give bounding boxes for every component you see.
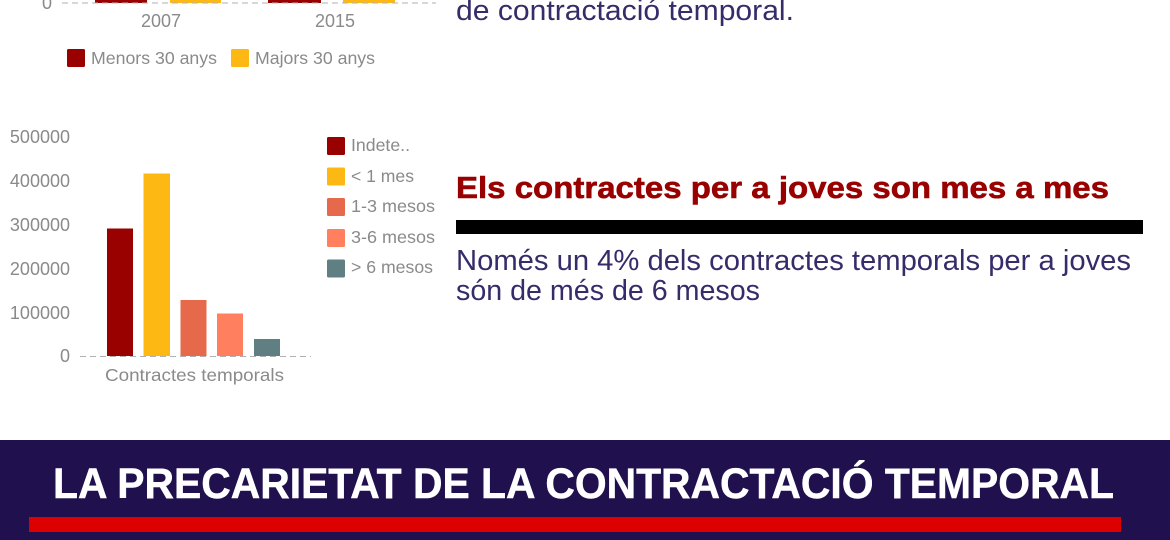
x axis label: Contractes temporals [105,365,284,385]
legend: age groups: Menors 30 anys [91,48,217,68]
y axis labels [10,127,70,366]
y axis labels: 100000 [10,303,70,323]
heading: contracts for young people: Els contractes per a joves son mes a mes [456,170,1109,205]
bar chart: temporary contracts by duration [10,127,435,385]
bars 2007 [95,0,221,3]
y axis labels: 200000 [10,259,70,279]
black rule under heading [456,220,1143,234]
bars 2015 [268,0,395,3]
y axis labels: 0 [60,346,70,366]
legend: age groups: Majors 30 anys [255,48,375,68]
banner red bar [29,517,1121,532]
y axis labels: 300000 [10,215,70,235]
legend: contract durations: 3-6 mesos [351,227,435,247]
legend: contract durations: > 6 mesos [351,257,433,277]
y axis labels: 400000 [10,171,70,191]
text block: only 4 percent: són de més de 6 mesos [456,275,760,307]
legend: contract durations: 1-3 mesos [351,196,435,216]
text block: only 4 percent: Només un 4% dels contractes temporals per a joves [456,245,1131,277]
x axis label 2007: 2007 [141,11,181,31]
x axis label 2015: 2015 [315,11,355,31]
bars [107,174,280,356]
text block: only 4 percent [456,245,1131,307]
legend: age groups [67,48,375,68]
banner: footer title [0,440,1170,540]
legend: contract durations [327,135,435,278]
y axis labels: 500000 [10,127,70,147]
bar chart: contracts by age, 2007 and 2015 [42,0,436,68]
banner title: LA PRECARIETAT DE LA CONTRACTACIÓ TEMPORAL [53,459,1114,508]
legend: contract durations: < 1 mes [351,166,414,186]
legend: contract durations: Indete.. [351,135,410,155]
